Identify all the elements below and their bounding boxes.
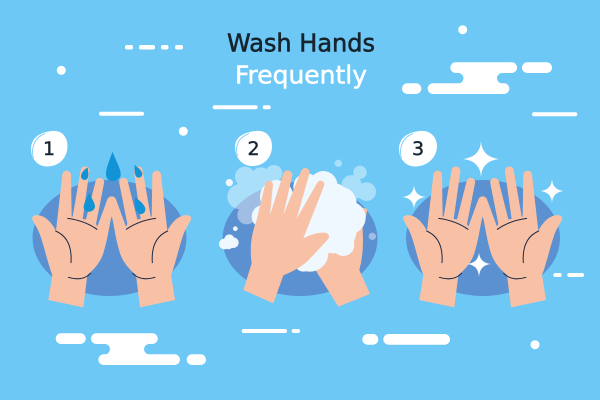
cloud: bottom right xyxy=(362,334,450,345)
step 1 badge xyxy=(31,131,68,167)
step 3 badge xyxy=(399,131,437,167)
step 1 hands xyxy=(32,165,191,307)
step 1 backdrop ellipse xyxy=(32,180,186,296)
cloud: top right xyxy=(402,62,552,94)
step 3 panel xyxy=(399,131,564,307)
step 3 hands xyxy=(403,166,562,307)
step 2 badge xyxy=(235,131,272,166)
sparkles xyxy=(402,141,564,277)
back hand xyxy=(313,207,370,307)
title: Frequently xyxy=(235,60,367,90)
step 3 backdrop ellipse xyxy=(406,180,560,296)
step 1 panel xyxy=(31,131,191,307)
title xyxy=(227,28,375,90)
step 1 badge: 1 xyxy=(43,138,55,160)
translucent foam xyxy=(227,160,376,240)
cloud: bottom left xyxy=(56,333,206,365)
decorative dashes and dots xyxy=(57,25,584,349)
step 3 badge: 3 xyxy=(412,138,424,160)
step 2 panel xyxy=(219,131,378,307)
small white bubbles xyxy=(219,179,239,249)
front hand xyxy=(243,168,329,303)
center water drop xyxy=(106,152,121,181)
step 2 backdrop ellipse xyxy=(222,182,378,296)
water drops on fingers xyxy=(81,165,145,214)
step 2 hands and soap foam xyxy=(219,160,376,307)
main foam xyxy=(252,171,366,272)
step 2 badge: 2 xyxy=(247,138,260,160)
title: Wash Hands xyxy=(227,28,375,58)
